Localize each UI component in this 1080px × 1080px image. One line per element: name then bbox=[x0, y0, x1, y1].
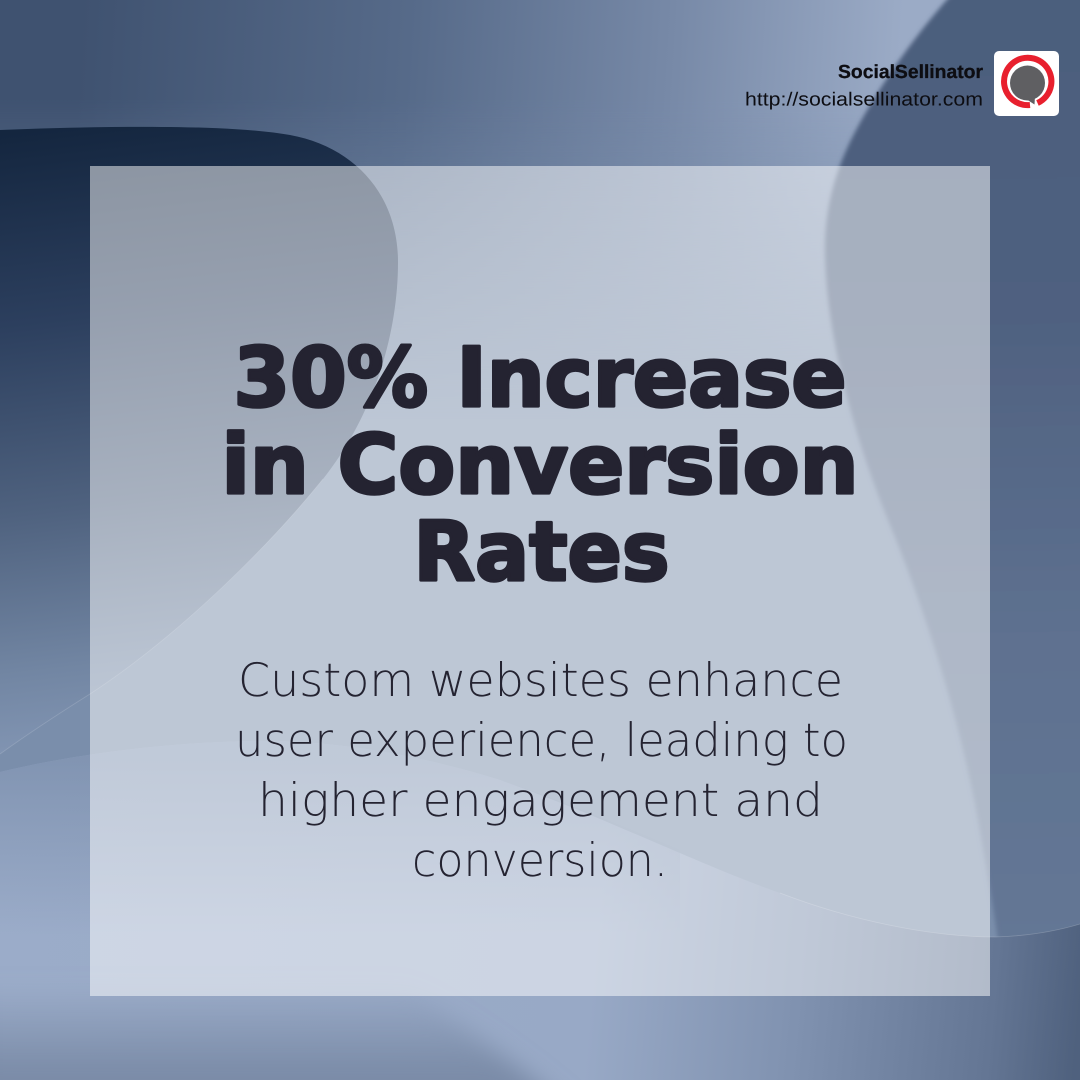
panel: translucent content card bbox=[90, 166, 990, 996]
brand name and URL: http://socialsellinator.com bbox=[745, 90, 983, 110]
body text bbox=[235, 653, 848, 887]
title: in Conversion bbox=[222, 418, 858, 513]
title bbox=[222, 331, 858, 600]
brand name and URL: SocialSellinator bbox=[838, 62, 984, 83]
body text: Custom websites enhance bbox=[238, 653, 843, 707]
body text: conversion. bbox=[412, 833, 668, 887]
icon: SocialSellinator logo bbox=[994, 51, 1059, 116]
title: 30% Increase bbox=[234, 331, 846, 426]
brand name and URL bbox=[745, 62, 984, 110]
title: Rates bbox=[414, 505, 670, 600]
body text: higher engagement and bbox=[258, 773, 823, 827]
body text: user experience, leading to bbox=[235, 713, 848, 767]
